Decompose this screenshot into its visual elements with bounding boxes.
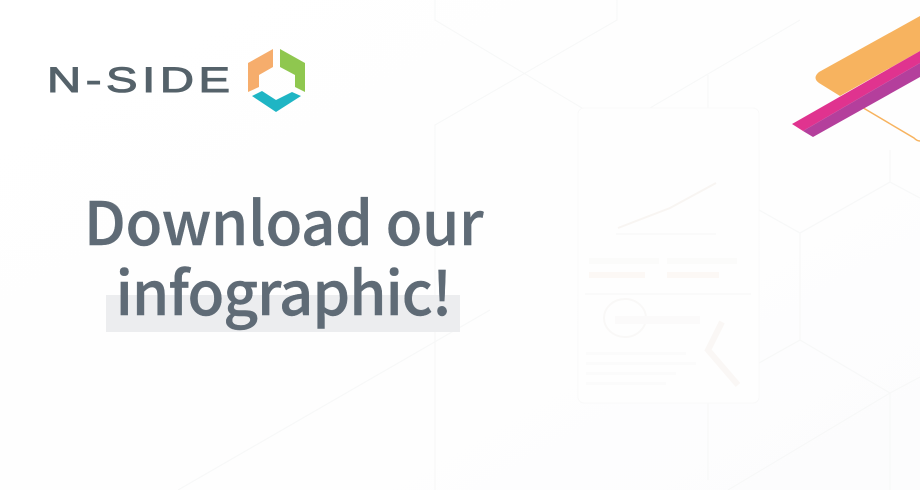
logo icon: teal segment — [252, 91, 301, 112]
thin orange line — [860, 106, 920, 141]
magenta ribbon — [792, 51, 920, 131]
logo wordmark: N-SIDE — [47, 60, 235, 100]
logo icon: green segment — [280, 49, 305, 92]
logo icon: orange segment — [248, 49, 273, 92]
title highlight bar — [106, 295, 460, 332]
purple ribbon shade — [803, 63, 920, 137]
title: line 2: infographic! — [116, 246, 451, 333]
logo: N-SIDE — [47, 49, 305, 112]
title: line 1: Download our — [84, 176, 483, 263]
orange ribbon — [816, 16, 920, 96]
